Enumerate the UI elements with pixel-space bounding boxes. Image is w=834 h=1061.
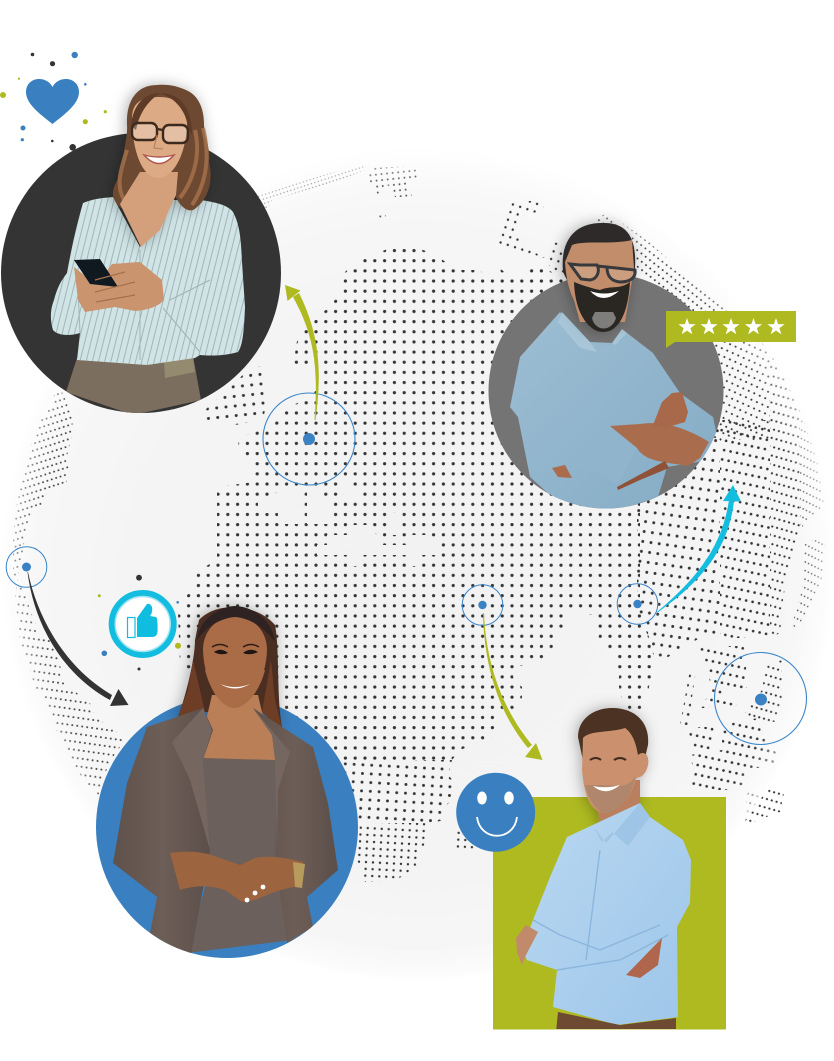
neck and chest: [203, 695, 276, 762]
map: far left upper americas: [13, 390, 73, 577]
map: east limb edge: [800, 410, 824, 530]
circle backdrop: dark: [1, 133, 281, 413]
circle backdrop: grey: [488, 274, 724, 508]
photo figure: woman in blazer: [113, 606, 338, 960]
map: north-east edge piece: [545, 240, 600, 300]
trousers: [66, 356, 201, 415]
glasses: [132, 123, 188, 143]
photo figure: man in blue shirt: [516, 708, 691, 1032]
lapel shading: [172, 708, 290, 850]
map: east block outer: [720, 420, 770, 638]
map: Australia south: [690, 718, 780, 790]
collar: [593, 803, 650, 846]
arrow: olive to woman with phone: [285, 285, 319, 420]
map: Eurasia and Africa north: [178, 243, 653, 760]
clasped hands: [170, 852, 305, 902]
face features: [212, 644, 259, 688]
map: Australia east strip: [745, 660, 782, 722]
head and hair: [113, 85, 211, 247]
circle backdrop: blue: [96, 696, 358, 958]
blazer left side: [113, 708, 213, 960]
map: tiny island: [377, 213, 386, 220]
glasses: [570, 264, 635, 282]
arrow: dark to woman in blazer: [28, 572, 128, 706]
rating stars: [678, 318, 785, 334]
trouser waist fold: [164, 358, 195, 378]
globe background: [3, 150, 833, 980]
panel: woman in blazer: [96, 606, 358, 960]
shirt: [522, 803, 691, 1025]
map: far left lower americas: [15, 577, 125, 795]
map: island under smiley: [456, 830, 478, 850]
map: far east strip: [792, 540, 825, 628]
map: top arc sliver: [257, 165, 365, 215]
target circle: south east: [714, 652, 806, 744]
target circle: east: [617, 584, 658, 624]
map: upper right band: [690, 312, 770, 440]
dotted world map: [13, 165, 825, 882]
panel: bearded man with rating: [488, 223, 796, 512]
panel: man in blue shirt: [493, 708, 726, 1032]
map: Australia south west: [688, 727, 716, 752]
photo figure: bearded man: [510, 223, 718, 512]
icon: heart with confetti: [0, 52, 107, 151]
map: north-west island: [205, 365, 268, 425]
left hand: [516, 925, 538, 965]
map: southern Africa: [300, 760, 457, 823]
crossed forearms: [552, 392, 709, 490]
target circle: north-west: [263, 393, 355, 485]
belt: [556, 1012, 676, 1029]
panel: woman with phone: [1, 85, 281, 415]
icon: smiley face: [456, 773, 535, 852]
map: southern Africa tip: [345, 823, 429, 882]
map: Australia north: [698, 646, 747, 708]
blazer right side: [253, 708, 338, 943]
map: peninsula: [497, 200, 545, 258]
map: Australia west coast: [680, 670, 696, 725]
shirt: [51, 197, 245, 365]
head: [563, 223, 635, 332]
icon: thumbs up badge with confetti: [98, 575, 181, 670]
square backdrop: green: [493, 797, 726, 1030]
map: upper right arc: [590, 212, 735, 330]
arrow: olive to man in blue shirt: [483, 613, 542, 760]
map: east limb: [770, 352, 800, 638]
arrow: cyan to bearded man: [657, 485, 741, 612]
photo figure: woman with phone: [51, 85, 245, 415]
target circle: centre: [462, 585, 503, 625]
collar and placket: [558, 312, 627, 352]
smile: [144, 135, 174, 164]
head: [578, 708, 648, 830]
right forearm: [626, 938, 662, 978]
dress: [187, 758, 293, 953]
shirt: [510, 312, 718, 512]
map: east block: [637, 420, 720, 663]
globe edge fade: [3, 150, 833, 980]
head, hair and braids: [176, 606, 283, 732]
map: south east edge: [745, 788, 785, 825]
chin over neck: [205, 670, 265, 708]
rating speech bubble: [666, 311, 796, 348]
map: top island: [365, 166, 418, 197]
target circle: far left: [6, 547, 47, 587]
sleeve folds: [533, 850, 668, 970]
hands and phone: [74, 259, 164, 312]
